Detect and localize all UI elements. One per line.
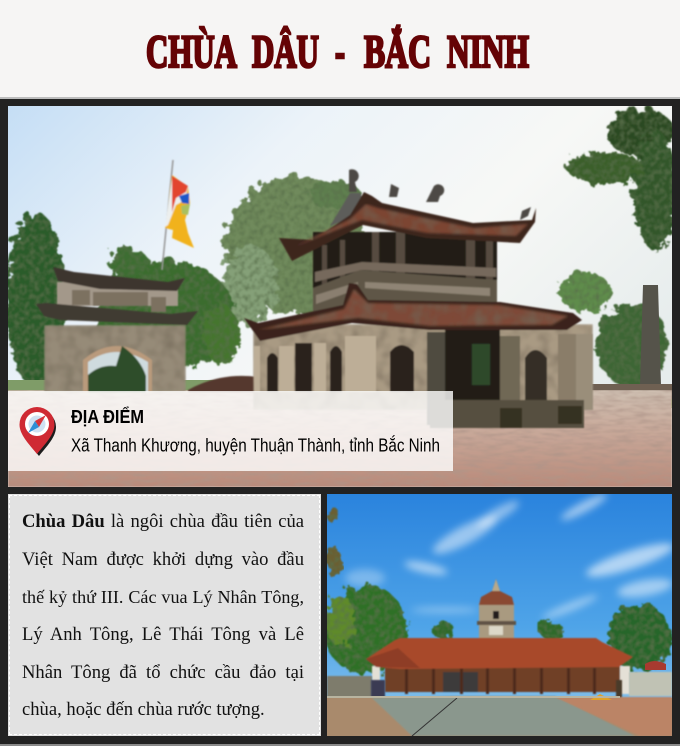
text line 2: Việt Nam được khởi dựng vào đầu (22, 549, 304, 570)
title (146, 25, 529, 78)
upper roof (279, 192, 536, 261)
photo: Dau pagoda courtyard (324, 490, 677, 736)
trees behind the buildings (6, 108, 677, 388)
courtyard (327, 698, 672, 736)
title: DÂU (252, 26, 319, 78)
icon: map pin compass (20, 407, 56, 456)
gable (330, 192, 362, 226)
title: BẮC (364, 25, 431, 78)
text line 4: Lý Anh Tông, Lê Thái Tông và Lê (22, 624, 304, 645)
tower (477, 579, 516, 640)
panel: story text (8, 494, 321, 736)
far field and stone pillar (8, 380, 216, 392)
leafy branches top left (326, 507, 342, 578)
pagoda (244, 169, 593, 428)
location address: Xã Thanh Khương, huyện Thuận Thành, tỉnh Bắc Ninh (71, 434, 440, 456)
text line 6: chùa, hoặc đến chùa rước tượng. (22, 699, 265, 720)
fences (629, 672, 672, 696)
bottom edge (0, 744, 680, 746)
header band (0, 0, 680, 99)
text line 3: thế kỷ thứ III. Các vua Lý Nhân Tông, (22, 587, 304, 607)
upper storey (313, 232, 497, 290)
ground (8, 390, 672, 487)
temple hall (366, 638, 633, 694)
text line 1: Chùa Dâu là ngôi chùa đầu tiên của (22, 511, 304, 532)
location bar background (8, 391, 453, 471)
gate (36, 267, 198, 392)
lower roof (244, 283, 582, 341)
trees (324, 586, 672, 674)
title: NINH (447, 26, 529, 78)
people (371, 680, 622, 698)
lower walls (253, 324, 593, 410)
title: CHÙA (146, 26, 237, 78)
text line 5: Nhân Tông đã tổ chức cầu đảo tại (22, 662, 304, 683)
location heading: ĐỊA ĐIỂM (71, 406, 144, 427)
roof finials (349, 169, 531, 220)
clouds (345, 490, 677, 622)
title: - (335, 26, 345, 78)
photo: Dau pagoda tower and gate (6, 106, 677, 487)
flag (162, 160, 194, 270)
